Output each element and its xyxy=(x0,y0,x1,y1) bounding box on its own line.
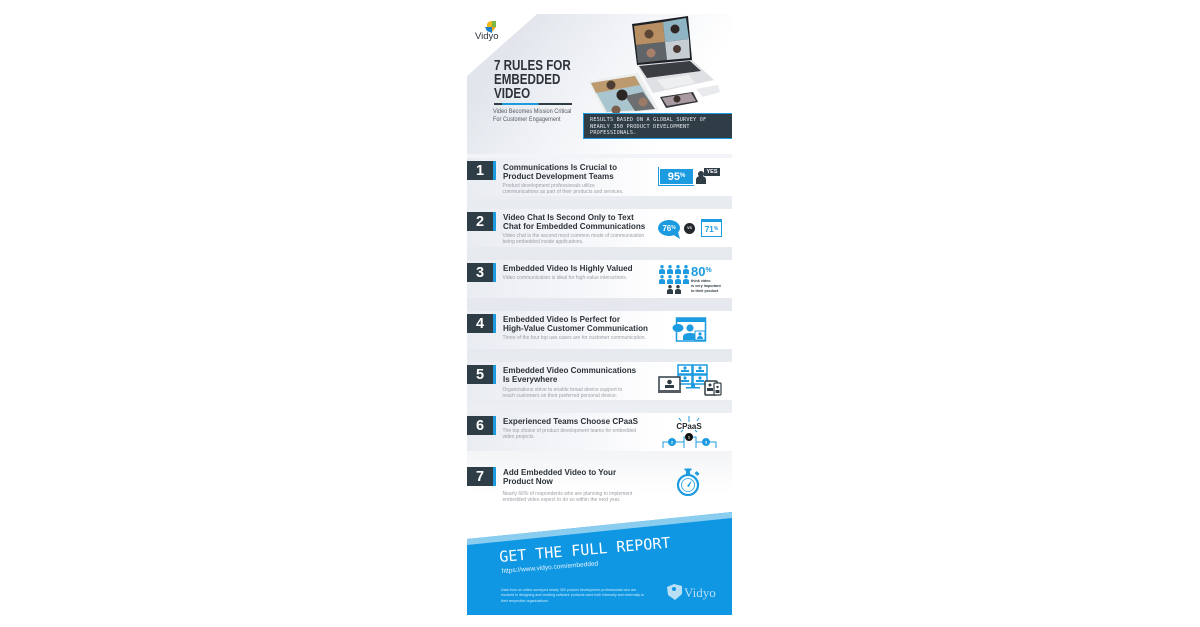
rule 6 heading: Experienced Teams Choose CPaaS xyxy=(502,416,637,426)
icon: 76% vs 71%: VS xyxy=(687,226,692,230)
rule 7 xyxy=(467,467,700,503)
rule 6 text: video projects. xyxy=(502,434,535,440)
CTA heading: GET THE FULL REPORT xyxy=(499,534,671,566)
mouse pad xyxy=(696,85,720,97)
footnote: Data from an online surveyed nearly 350 product development professionals who are xyxy=(501,588,636,592)
footnote: involved in designing and creating software products used both internally and externally to xyxy=(501,593,644,597)
rule 6 text xyxy=(502,428,636,440)
icon: 80% people: is very important xyxy=(691,284,721,288)
subtitle: Video Becomes Mission Critical xyxy=(493,108,571,115)
title: VIDEO xyxy=(494,86,530,102)
rule 4 heading: Embedded Video Is Perfect for xyxy=(502,314,620,324)
logo: Vidyo: Vidyo xyxy=(475,31,499,42)
icon: multiple devices xyxy=(658,364,722,396)
rule 1 text xyxy=(502,183,623,195)
rule 3 text: Video communication is ideal for high-value interactions. xyxy=(502,275,627,281)
icon: 80% people: to their product xyxy=(691,289,718,293)
title rule xyxy=(494,103,572,105)
rule 5 text: Organizations strive to enable broad device support to xyxy=(502,387,622,393)
title xyxy=(494,58,571,102)
header white corner xyxy=(467,14,537,76)
icon: CPaaS ranking xyxy=(662,416,716,448)
rule 2 text: Video chat is the second most common mode of communication xyxy=(502,233,644,239)
title: 7 RULES FOR xyxy=(494,58,571,74)
icon: 80% people: 80% xyxy=(691,264,712,279)
rule 6 xyxy=(467,413,732,451)
icon: 76% vs 71%: 71% xyxy=(705,225,718,234)
number 3 xyxy=(467,263,496,282)
icon: 95% bar xyxy=(658,167,720,186)
survey callout: NEARLY 350 PRODUCT DEVELOPMENT xyxy=(590,124,690,130)
rule 7 text: embedded video expect to do so within the next year. xyxy=(502,497,620,503)
rule 5 heading: Is Everywhere xyxy=(502,374,557,384)
subtitle xyxy=(493,108,571,123)
icon: 80% people: think video xyxy=(691,279,710,283)
laptop screen xyxy=(632,16,692,65)
icon: stopwatch xyxy=(676,468,700,496)
logo: Vidyo xyxy=(475,21,499,42)
rule 4 xyxy=(467,311,732,349)
number 7 xyxy=(467,467,496,486)
number 2 xyxy=(467,212,496,231)
rule 7 heading xyxy=(502,467,616,486)
rule 5 text: reach customers on their preferred personal device. xyxy=(502,393,617,399)
number 5: 5 xyxy=(476,367,484,383)
rule 2 xyxy=(467,209,732,247)
title: EMBEDDED xyxy=(494,72,560,88)
rule 1 heading xyxy=(502,162,617,181)
rule 1 xyxy=(467,158,732,196)
icon: video window with chat xyxy=(672,317,706,342)
rule 5 xyxy=(467,362,732,400)
rule 6 text: The top choice of product development teams for embedded xyxy=(502,428,636,434)
number 1: 1 xyxy=(476,163,484,179)
footnote: their respective organizations. xyxy=(501,599,549,603)
logo: Vidyo footer: Vidyo xyxy=(684,585,716,600)
laptop illustration xyxy=(588,16,720,113)
icon: 95% bar: YES xyxy=(706,169,718,175)
rule 1 heading: Product Development Teams xyxy=(502,171,613,181)
number 4: 4 xyxy=(476,316,484,332)
number 2: 2 xyxy=(476,214,484,230)
rule 7 text: Nearly 66% of respondents who are planning to implement xyxy=(502,491,632,497)
tablet xyxy=(588,73,659,114)
rule 7 heading: Add Embedded Video to Your xyxy=(502,467,616,477)
number 1 xyxy=(467,161,496,180)
icon: CPaaS ranking: 1 xyxy=(688,434,691,440)
rule 2 heading: Video Chat Is Second Only to Text xyxy=(502,212,633,222)
rule 1 text: communications as part of their products and services. xyxy=(502,189,623,195)
survey callout: RESULTS BASED ON A GLOBAL SURVEY OF xyxy=(590,117,706,123)
infographic panel xyxy=(467,14,732,615)
number 6: 6 xyxy=(476,418,484,434)
rule 4 heading: High-Value Customer Communication xyxy=(502,323,647,333)
number 7: 7 xyxy=(476,469,484,485)
icon: CPaaS ranking: CPaaS xyxy=(676,422,702,431)
rule 2 text: being embedded inside applications. xyxy=(502,239,583,245)
subtitle: For Customer Engagement xyxy=(493,116,561,123)
call to action banner xyxy=(467,512,732,615)
rule 1 text: Product development professionals utilize xyxy=(502,183,595,189)
icon: CPaaS ranking: 2 xyxy=(671,440,674,444)
rule 5 heading: Embedded Video Communications xyxy=(502,365,636,375)
number 3: 3 xyxy=(476,265,484,281)
footnote xyxy=(501,588,644,603)
phone xyxy=(660,92,698,108)
rule 2 heading xyxy=(502,212,645,231)
header area xyxy=(467,14,732,154)
rule 7 text xyxy=(502,491,632,503)
CTA URL: https://www.vidyo.com/embedded xyxy=(501,560,598,575)
rule 5 text xyxy=(502,387,622,399)
number 6 xyxy=(467,416,496,435)
rule 3 heading: Embedded Video Is Highly Valued xyxy=(502,263,632,273)
logo: Vidyo footer xyxy=(667,584,716,600)
rule 7 heading: Product Now xyxy=(502,476,552,486)
survey callout xyxy=(583,113,733,139)
rule 2 heading: Chat for Embedded Communications xyxy=(502,221,645,231)
rule 1 heading: Communications Is Crucial to xyxy=(502,162,617,172)
icon: CPaaS ranking: 3 xyxy=(705,440,708,444)
rule 4 text: Three of the four top use cases are for customer communication. xyxy=(502,335,646,341)
icon: 76% vs 71% xyxy=(658,219,722,239)
number 5 xyxy=(467,365,496,384)
icon: 76% vs 71%: 76% xyxy=(662,224,676,233)
rule 4 heading xyxy=(502,314,648,333)
laptop base xyxy=(637,60,714,93)
survey callout: PROFESSIONALS. xyxy=(590,130,637,136)
icon: 80% people xyxy=(659,264,721,294)
icon: 95% bar: 95% xyxy=(668,171,685,183)
number 4 xyxy=(467,314,496,333)
rule 5 heading xyxy=(502,365,636,384)
rule 3 xyxy=(467,260,732,298)
rule 2 text xyxy=(502,233,644,245)
